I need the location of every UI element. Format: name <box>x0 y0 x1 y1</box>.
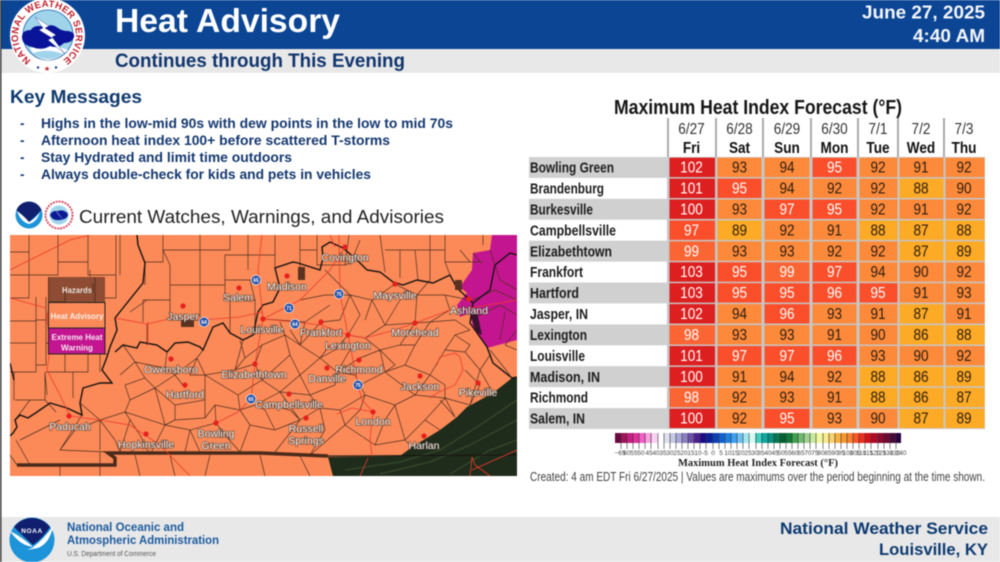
table row names: Louisville <box>530 349 585 365</box>
table row names: Salem, IN <box>530 412 585 428</box>
key messages list <box>20 116 453 182</box>
color bar labels: 30 <box>751 450 759 457</box>
column: 7/2 Wed: 91 <box>913 160 929 177</box>
city markers and labels: Salem <box>223 292 253 304</box>
color bar labels: 80 <box>817 450 825 457</box>
color bar labels: 50 <box>637 450 645 457</box>
city markers and labels: Jasper <box>167 311 199 323</box>
column: 7/1 Tue: 90 <box>870 327 886 344</box>
column: 6/30 Mon: 95 <box>827 160 842 177</box>
heat index table <box>529 118 985 429</box>
table row names: Brandenburg <box>530 182 604 198</box>
column: 7/2 Wed: 87 <box>913 306 929 323</box>
column: 7/3 Thu <box>946 158 984 428</box>
table header: dates and days: 7/3 <box>955 121 973 138</box>
column: 6/27 Fri: 99 <box>684 243 699 261</box>
color bar labels: 35 <box>757 450 765 457</box>
extreme heat warning area <box>457 235 517 348</box>
icon: National Weather Service logo: ★ <box>44 65 50 73</box>
table row names <box>529 157 668 429</box>
column: 6/29 Sun: 94 <box>779 160 795 177</box>
column: 6/30 Mon: 92 <box>827 243 842 261</box>
column: 6/28 Sat: 94 <box>732 306 747 323</box>
Ohio river and state boundaries <box>10 235 517 436</box>
column: 7/1 Tue: 91 <box>870 306 886 323</box>
date and time <box>862 2 985 46</box>
column: 7/1 Tue: 95 <box>870 285 886 302</box>
table row names: Lexington <box>530 328 587 344</box>
table row names: Jasper, IN <box>530 307 588 323</box>
interstate shields <box>199 275 363 404</box>
color bar labels: 30 <box>666 450 674 457</box>
city markers and labels: Bowling <box>198 428 235 440</box>
column: 6/27 Fri: 101 <box>680 348 703 365</box>
column: 7/2 Wed: 87 <box>913 411 929 428</box>
column: 6/28 Sat: 89 <box>732 222 747 240</box>
column: 6/29 Sun: 92 <box>779 222 795 240</box>
map: current watches, warnings and advisories <box>10 235 517 476</box>
column: 6/28 Sat: 93 <box>732 201 747 219</box>
subtitle: Continues through This Evening <box>115 51 405 72</box>
column: 7/2 Wed: 87 <box>913 243 929 261</box>
column: 7/1 Tue: 92 <box>870 181 886 198</box>
interstate shields: 65 <box>248 397 254 403</box>
color bar labels: 25 <box>673 450 681 457</box>
column: 6/30 Mon: 91 <box>827 327 842 344</box>
table row names: Frankfort <box>530 265 583 281</box>
icon: small NOAA logo <box>16 202 42 228</box>
interstate shields: 64 <box>201 320 207 326</box>
city markers and labels: Richmond <box>335 364 383 376</box>
column: 6/30 Mon: 91 <box>827 390 842 407</box>
column: 6/30 Mon: 97 <box>827 264 842 282</box>
color bar labels: 25 <box>744 450 752 457</box>
map legend: extreme heat warning <box>48 328 105 354</box>
table header: dates and days: 6/30 <box>821 121 848 138</box>
table header: dates and days: Wed <box>907 140 935 157</box>
color bar labels: 55 <box>630 450 638 457</box>
color bar labels: 65 <box>797 450 805 457</box>
color bar labels: 105 <box>850 450 861 457</box>
color bar labels: 40 <box>652 450 660 457</box>
column: 7/3 Thu: 90 <box>956 181 972 198</box>
column: 6/27 Fri <box>670 158 715 428</box>
table row names: Hartford <box>530 286 579 302</box>
key messages list: - <box>20 167 24 182</box>
column: 6/28 Sat: 93 <box>732 327 747 344</box>
city markers and labels: Green <box>201 440 231 452</box>
column: 6/30 Mon: 96 <box>827 348 842 365</box>
column: 6/28 Sat: 97 <box>732 348 747 365</box>
color bar labels <box>614 450 907 457</box>
interstate shields: 75 <box>355 383 361 389</box>
color bar labels: 95 <box>837 450 845 457</box>
column: 6/29 Sun: 93 <box>779 327 795 344</box>
key messages list: Highs in the low-mid 90s with dew points in the low to mid 70s <box>41 116 453 131</box>
color bar labels: 120 <box>870 450 881 457</box>
office identification: National Weather Service <box>780 519 988 538</box>
color bar labels: 50 <box>777 450 785 457</box>
column: 7/2 Wed: 91 <box>913 285 929 302</box>
southern state boundary <box>17 453 328 465</box>
city markers and labels: Danville <box>308 373 346 385</box>
color bar labels: 45 <box>645 450 653 457</box>
column: 7/1 Tue: 92 <box>870 160 886 177</box>
column: 6/27 Fri: 98 <box>684 390 699 407</box>
table row names: Richmond <box>530 391 588 407</box>
column: 6/27 Fri: 100 <box>680 369 703 386</box>
table header: dates and days: Sun <box>774 140 800 157</box>
city markers and labels: Madison <box>267 281 307 293</box>
column: 6/29 Sun: 93 <box>779 390 795 407</box>
color bar labels: 0 <box>711 450 715 457</box>
table row names: Bowling Green <box>530 161 614 177</box>
color bar labels: 90 <box>831 450 839 457</box>
column: 7/3 Thu: 88 <box>956 327 972 344</box>
interstate shields: 64 <box>292 322 298 328</box>
color bar labels: 10 <box>724 450 732 457</box>
column: 6/27 Fri: 100 <box>680 411 703 428</box>
city markers and labels: Paducah <box>49 421 91 433</box>
column: 6/28 Sat: 93 <box>732 243 747 261</box>
color bar labels: 125 <box>876 450 887 457</box>
column: 6/27 Fri: 103 <box>680 285 703 302</box>
icon: National Weather Service logo: NATIONAL WEATHER SERVICE <box>10 0 84 66</box>
table header: dates and days: Fri <box>683 140 700 157</box>
color scale legend <box>614 433 907 469</box>
map legend: hazards: Hazards <box>62 285 92 295</box>
key messages list: Always double-check for kids and pets in vehicles <box>41 167 371 182</box>
table column separators <box>668 118 944 157</box>
column: 7/3 Thu: 92 <box>956 201 972 219</box>
title: Heat Advisory <box>115 2 341 39</box>
key messages list: Stay Hydrated and limit time outdoors <box>41 150 292 165</box>
column: 7/1 Tue: 92 <box>870 243 886 261</box>
NOAA text block: Atmospheric Administration <box>67 535 219 547</box>
table header: dates and days: 6/29 <box>774 121 800 138</box>
color bar labels: 110 <box>856 450 867 457</box>
column: 6/30 Mon <box>812 158 856 428</box>
column: 7/1 Tue: 90 <box>870 411 886 428</box>
column: 7/3 Thu: 92 <box>956 264 972 282</box>
column: 6/28 Sat: 95 <box>732 181 747 198</box>
column: 6/30 Mon: 92 <box>827 369 842 386</box>
city markers and labels: Hartford <box>166 389 204 401</box>
table row names: Elizabethtown <box>530 244 612 260</box>
key messages list: - <box>20 116 24 131</box>
column: 6/28 Sat: 91 <box>732 369 747 386</box>
column: 6/30 Mon: 91 <box>827 222 842 240</box>
column: 7/2 Wed: 86 <box>913 390 929 407</box>
column: 7/1 Tue <box>860 158 898 428</box>
color bar labels: 45 <box>771 450 779 457</box>
column: 7/1 Tue: 94 <box>870 264 886 282</box>
column: 6/27 Fri: 102 <box>680 306 703 323</box>
column: 6/28 Sat: 92 <box>732 411 747 428</box>
office identification: Louisville, KY <box>879 540 989 559</box>
color bar labels: 5 <box>719 450 723 457</box>
color bar labels: 75 <box>811 450 819 457</box>
city markers and labels: Russell <box>289 423 323 435</box>
table header: dates and days: Tue <box>866 140 890 157</box>
column: 7/2 Wed: 88 <box>913 181 929 198</box>
city markers and labels: Frankfort <box>300 327 342 339</box>
terrain outside the advisory area <box>328 377 517 476</box>
city markers and labels: Ashland <box>450 305 488 317</box>
city markers and labels: Louisville <box>240 324 284 336</box>
table header: dates and days: 7/1 <box>869 121 887 138</box>
column: 6/27 Fri: 98 <box>684 327 699 344</box>
column: 6/29 Sun: 94 <box>779 369 795 386</box>
city markers and labels: Jackson <box>401 381 439 393</box>
color bar labels: 100 <box>843 450 854 457</box>
table row names: Madison, IN <box>530 370 600 386</box>
column: 6/29 Sun: 95 <box>779 411 795 428</box>
column: 7/3 Thu: 89 <box>956 411 972 428</box>
NOAA text block: National Oceanic and <box>67 522 184 534</box>
column: 6/29 Sun: 97 <box>779 201 795 219</box>
table header: dates and days <box>678 121 976 157</box>
column: 6/28 Sat: 92 <box>732 390 747 407</box>
interstate shields: 75 <box>336 292 342 298</box>
map legend: hazards <box>48 277 105 302</box>
city markers and labels: Hopkinsville <box>118 439 174 451</box>
column: 7/1 Tue: 92 <box>870 201 886 219</box>
heading: watches and warnings: Current Watches, Warnings, and Advisories <box>79 206 444 227</box>
city markers and labels: Springs <box>288 435 324 447</box>
city markers and labels: London <box>355 416 391 428</box>
table header: dates and days: Thu <box>952 140 976 157</box>
column: 6/27 Fri: 102 <box>680 160 703 177</box>
column: 7/1 Tue: 88 <box>870 369 886 386</box>
column: 6/30 Mon: 92 <box>827 181 842 198</box>
column: 7/2 Wed: 91 <box>913 201 929 219</box>
city markers and labels: Owensboro <box>144 364 198 376</box>
key messages list: - <box>20 133 24 148</box>
city markers and labels <box>49 244 497 452</box>
date and time: 4:40 AM <box>913 25 985 46</box>
column: 6/29 Sun: 94 <box>779 181 795 198</box>
roads <box>10 235 517 476</box>
icon: small NWS logo <box>46 202 72 228</box>
interstate shields: 65 <box>253 278 259 284</box>
table header: dates and days: 6/27 <box>678 121 705 138</box>
color bar caption: Maximum Heat Index Forecast (°F) <box>678 458 838 469</box>
column: 6/29 Sun: 96 <box>779 306 795 323</box>
city markers and labels: Elizabethtown <box>221 369 287 381</box>
color bar labels: 115 <box>863 450 874 457</box>
color bar labels: 60 <box>623 450 631 457</box>
column: 7/3 Thu: 87 <box>956 390 972 407</box>
color bar labels: 70 <box>804 450 812 457</box>
color bar labels: −65 <box>614 450 626 457</box>
column: 7/2 Wed: 86 <box>913 327 929 344</box>
column: 7/3 Thu: 89 <box>956 369 972 386</box>
column: 6/27 Fri: 97 <box>684 222 699 240</box>
city markers and labels: Harlan <box>409 440 440 452</box>
column: 7/2 Wed <box>900 158 944 428</box>
color bar labels: 85 <box>824 450 832 457</box>
color bar <box>615 433 901 443</box>
color bar labels: 135 <box>890 450 901 457</box>
column: 7/2 Wed: 87 <box>913 222 929 240</box>
column: 7/2 Wed: 90 <box>913 264 929 282</box>
heat index table title: Maximum Heat Index Forecast (°F) <box>614 97 902 119</box>
column: 6/28 Sat: 95 <box>732 285 747 302</box>
column: 6/27 Fri: 100 <box>680 201 703 219</box>
map legend: extreme heat warning: Warning <box>61 342 93 352</box>
column: 6/29 Sun: 99 <box>779 264 795 282</box>
color bar labels: 10 <box>694 450 702 457</box>
color bar labels: 15 <box>731 450 739 457</box>
table header: dates and days: 6/28 <box>726 121 753 138</box>
column: 6/30 Mon: 93 <box>827 306 842 323</box>
color bar ticks <box>621 433 896 449</box>
color bar labels: 35 <box>659 450 667 457</box>
color bar labels: 130 <box>883 450 894 457</box>
map legend: extreme heat warning: Extreme Heat <box>52 332 103 342</box>
heading: key messages: Key Messages <box>10 86 142 107</box>
NOAA text block: U.S. Department of Commerce <box>67 549 156 558</box>
table header: dates and days: Sat <box>729 140 750 157</box>
column: 7/1 Tue: 93 <box>870 348 886 365</box>
color bar labels: 55 <box>784 450 792 457</box>
column: 6/29 Sun: 95 <box>779 285 795 302</box>
column: 7/3 Thu: 89 <box>956 243 972 261</box>
color bar labels: 20 <box>680 450 688 457</box>
office identification <box>780 519 989 559</box>
city markers and labels: Pikeville <box>459 387 497 399</box>
city markers and labels: Covington <box>321 252 369 264</box>
column: 6/28 Sat: 95 <box>732 264 747 282</box>
table row names: Burkesville <box>530 202 593 218</box>
icon: NOAA logo <box>10 518 54 562</box>
column: 7/1 Tue: 88 <box>870 390 886 407</box>
column: 7/2 Wed: 86 <box>913 369 929 386</box>
city markers and labels: Campbellsville <box>255 399 323 411</box>
column: 6/27 Fri: 103 <box>680 264 703 282</box>
header banner <box>2 0 1000 73</box>
column: 7/3 Thu: 92 <box>956 348 972 365</box>
column: 7/2 Wed: 90 <box>913 348 929 365</box>
column: 6/27 Fri: 101 <box>680 181 703 198</box>
key messages list: - <box>20 150 24 165</box>
icon: NOAA logo: NOAA <box>21 528 43 535</box>
city markers and labels: Morehead <box>391 327 439 339</box>
table header: dates and days: 7/2 <box>912 121 930 138</box>
NOAA text block <box>67 522 219 558</box>
small hazard patches <box>181 267 462 327</box>
column: 6/29 Sun: 93 <box>779 243 795 261</box>
column: 6/28 Sat: 93 <box>732 160 747 177</box>
footer band <box>2 517 1000 562</box>
column: 7/3 Thu: 88 <box>956 222 972 240</box>
column: 6/29 Sun: 97 <box>779 348 795 365</box>
color bar labels: 20 <box>737 450 745 457</box>
date and time: June 27, 2025 <box>862 2 985 22</box>
color bar labels: 15 <box>687 450 695 457</box>
city markers and labels: Maysville <box>373 290 417 302</box>
column: 6/30 Mon: 93 <box>827 411 842 428</box>
color bar labels: -5 <box>702 450 708 457</box>
interstate shields: 71 <box>286 306 292 312</box>
column: 7/1 Tue: 88 <box>870 222 886 240</box>
column: 6/28 Sat <box>718 158 762 428</box>
column: 6/29 Sun <box>764 158 810 428</box>
map legend: heat advisory: Heat Advisory <box>50 311 104 321</box>
column: 7/3 Thu: 92 <box>956 160 972 177</box>
key messages list: Afternoon heat index 100+ before scattered T-storms <box>41 133 390 148</box>
color bar labels: 60 <box>791 450 799 457</box>
color bar labels: 140 <box>896 450 907 457</box>
map legend: heat advisory <box>48 302 105 328</box>
table header: dates and days: Mon <box>821 140 848 157</box>
city markers and labels: Lexington <box>325 340 371 352</box>
color bar labels: 40 <box>764 450 772 457</box>
table row names: Campbellsville <box>530 223 616 239</box>
column: 6/30 Mon: 95 <box>827 201 842 219</box>
column: 7/3 Thu: 91 <box>956 306 972 323</box>
table grid background <box>667 157 985 429</box>
column: 7/3 Thu: 93 <box>956 285 972 302</box>
county lines <box>10 235 517 476</box>
column: 6/30 Mon: 96 <box>827 285 842 302</box>
